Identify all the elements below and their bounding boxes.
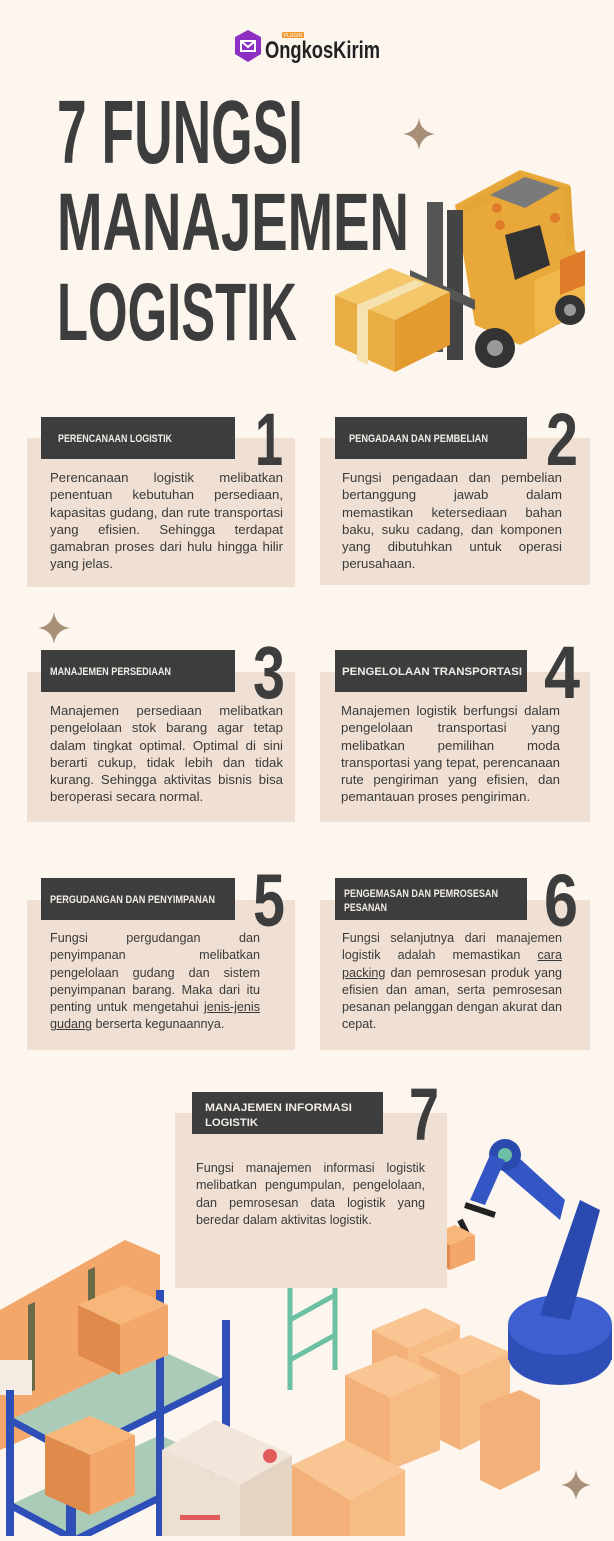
box background [27, 900, 295, 1050]
panel: 7 manajemen informasi logistik [175, 1080, 447, 1288]
box background [175, 1113, 447, 1288]
heading label [41, 417, 235, 459]
panel: 2 pengadaan dan pembelian [320, 405, 590, 585]
title [57, 90, 409, 350]
box background [320, 438, 590, 585]
heading label [41, 650, 235, 692]
logo: PLUGIN [284, 33, 303, 39]
heading label [335, 650, 527, 692]
heading label: PENGADAAN DAN PEMBELIAN [349, 433, 488, 445]
box background [27, 438, 295, 587]
forklift illustration [335, 170, 585, 372]
warehouse illustration bottom [0, 1139, 612, 1536]
icon: sparkle top [403, 118, 435, 150]
heading label [335, 417, 527, 459]
heading label: PENGEMASAN DAN PEMROSESAN [344, 888, 498, 900]
heading label: PERENCANAAN LOGISTIK [58, 433, 172, 445]
heading label: PENGELOLAAN TRANSPORTASI [342, 666, 522, 678]
heading label: PESANAN [344, 902, 387, 914]
heading label [335, 878, 527, 920]
body text: Fungsi pengadaan dan pembelian bertanggung jawab dalam memastikan ketersediaan bahan baku, suku cadang, dan komponen yang dibutuhkan untuk operasi perusahaan. [342, 470, 562, 571]
icon: sparkle bottom right [561, 1470, 591, 1500]
logo [235, 30, 380, 64]
heading label: MANAJEMEN PERSEDIAAN [50, 666, 171, 678]
heading label: LOGISTIK [205, 1117, 258, 1129]
box background [320, 672, 590, 822]
panel: 3 manajemen persediaan [27, 638, 295, 822]
box background [320, 900, 590, 1050]
body text: Fungsi pergudangan dan penyimpanan melibatkan pengelolaan gudang dan sistem penyimpanan barang. Maka dari itu penting untuk mengetahui jenis-jenis gudang berserta kegunaannya. [50, 931, 260, 1031]
body text: Fungsi manajemen informasi logistik melibatkan pengumpulan, pengelolaan, dan pemrosesan data logistik yang beredar dalam aktivitas logistik. [196, 1161, 425, 1227]
heading label: MANAJEMEN INFORMASI [205, 1102, 352, 1114]
body text: Manajemen logistik berfungsi dalam pengelolaan transportasi yang melibatkan pemilihan moda transportasi yang tepat, perencanaan rute pengiriman yang efisien, dan pemantauan proses pengiriman. [341, 703, 560, 804]
panel: 6 pengemasan dan pemrosesan pesanan [320, 866, 590, 1050]
heading label [41, 878, 235, 920]
body text: Perencanaan logistik melibatkan penentuan kebutuhan persediaan, kapasitas gudang, dan rute transportasi yang efisien. Sehingga terdapat gamabran proses dari hulu hingga hilir yang jelas. [50, 470, 283, 571]
box background [27, 672, 295, 822]
panel: 4 pengelolaan transportasi [320, 638, 590, 822]
panel: 5 pergudangan dan penyimpanan [27, 866, 295, 1050]
icon: sparkle left [38, 612, 70, 644]
panel: 1 perencanaan logistik [27, 405, 295, 587]
heading label [192, 1092, 383, 1134]
body text: Manajemen persediaan melibatkan pengelolaan stok barang agar tetap dalam tingkat optimal. Optimal di sini berarti cukup, tidak lebih dan tidak kurang. Sehingga aktivitas bisnis bisa beroperasi secara normal. [50, 703, 283, 804]
body text: Fungsi selanjutnya dari manajemen logistik adalah memastikan cara packing dan pemrosesan produk yang efisien dan aman, serta pemrosesan pesanan pelanggan dengan akurat dan cepat. [342, 931, 562, 1031]
